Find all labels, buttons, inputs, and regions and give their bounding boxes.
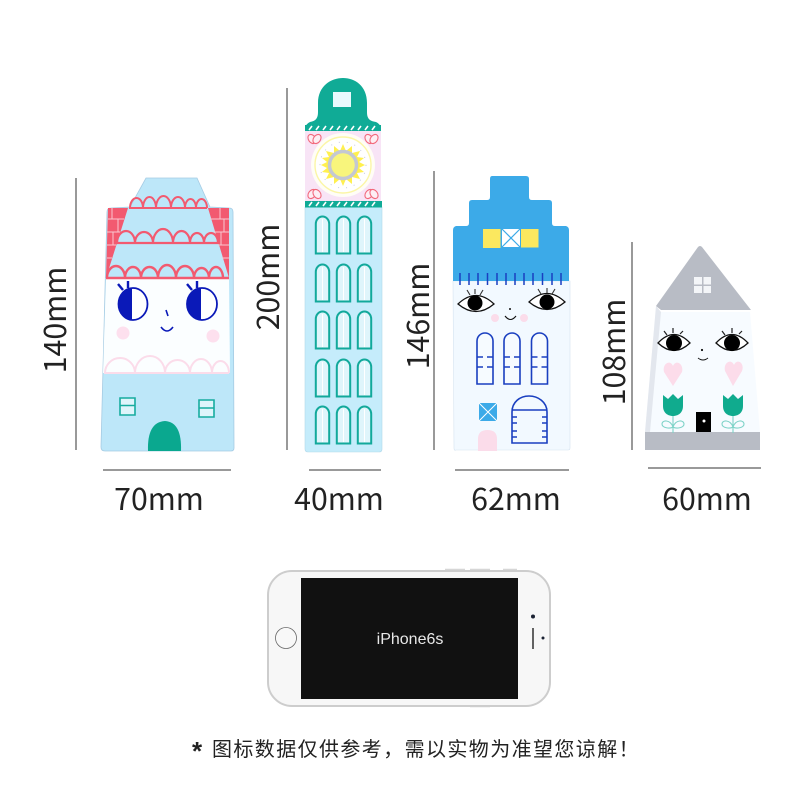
dimension: house 3 width: 62mm <box>471 475 561 519</box>
clock face <box>311 133 375 197</box>
iPhone 6s scale reference <box>268 570 550 706</box>
roof ticks <box>460 273 561 285</box>
blue roof <box>453 176 569 281</box>
house 4: grey roof house <box>645 246 760 450</box>
arched door <box>512 396 547 443</box>
dimension: house 4 height: 108mm <box>590 299 634 405</box>
red scallops <box>106 196 229 278</box>
pink door <box>478 430 497 451</box>
footnote: * <box>192 736 203 766</box>
green dome <box>305 78 381 131</box>
hearts <box>664 362 743 386</box>
footnote: 图标数据仅供参考，需以实物为准望您谅解！ <box>212 738 640 761</box>
eyes <box>658 328 748 351</box>
windows <box>120 398 214 417</box>
dimension: house 2 width: 40mm <box>294 475 384 519</box>
dimension: house 1 width: 70mm <box>114 475 204 519</box>
dome window <box>333 92 351 107</box>
dimension: house 4 width <box>648 468 761 519</box>
attic window <box>694 277 711 293</box>
phone body <box>268 571 550 706</box>
dimension: house 2 height: 200mm <box>244 224 288 330</box>
blue cross window <box>479 403 497 421</box>
speaker and sensors <box>531 614 544 649</box>
grey base <box>645 432 760 450</box>
dimension: house 1 width <box>103 470 231 519</box>
upper windows <box>477 333 548 384</box>
green strips <box>305 125 382 208</box>
home button <box>276 628 296 648</box>
white face panel <box>103 278 230 373</box>
nose and smile <box>698 349 708 360</box>
green door <box>148 421 181 451</box>
tower windows <box>316 216 371 444</box>
house 1: blue face house <box>101 178 234 451</box>
nose and smile <box>505 308 516 320</box>
black door <box>696 412 711 432</box>
model label: iPhone6s <box>377 631 443 648</box>
cheeks <box>116 326 220 342</box>
cheeks <box>491 314 528 322</box>
dimension: house 1 height: 140mm <box>31 267 75 373</box>
phone buttons <box>445 570 517 706</box>
tulips <box>662 394 744 433</box>
right eye <box>187 281 217 320</box>
dimension: house 3 height: 146mm <box>394 263 438 369</box>
left eye <box>118 281 148 320</box>
corner ornaments <box>306 133 380 200</box>
eyes <box>458 288 565 312</box>
red brick sides <box>106 208 229 278</box>
dimension: house 4 width: 60mm <box>662 475 752 519</box>
phone screen <box>301 578 518 699</box>
house 3: stepped gable house <box>453 176 570 451</box>
roof windows <box>483 229 538 248</box>
grey roof <box>656 246 751 310</box>
nose and smile <box>161 310 173 331</box>
house 2: clock tower <box>305 78 382 452</box>
pink scallops <box>104 356 229 373</box>
